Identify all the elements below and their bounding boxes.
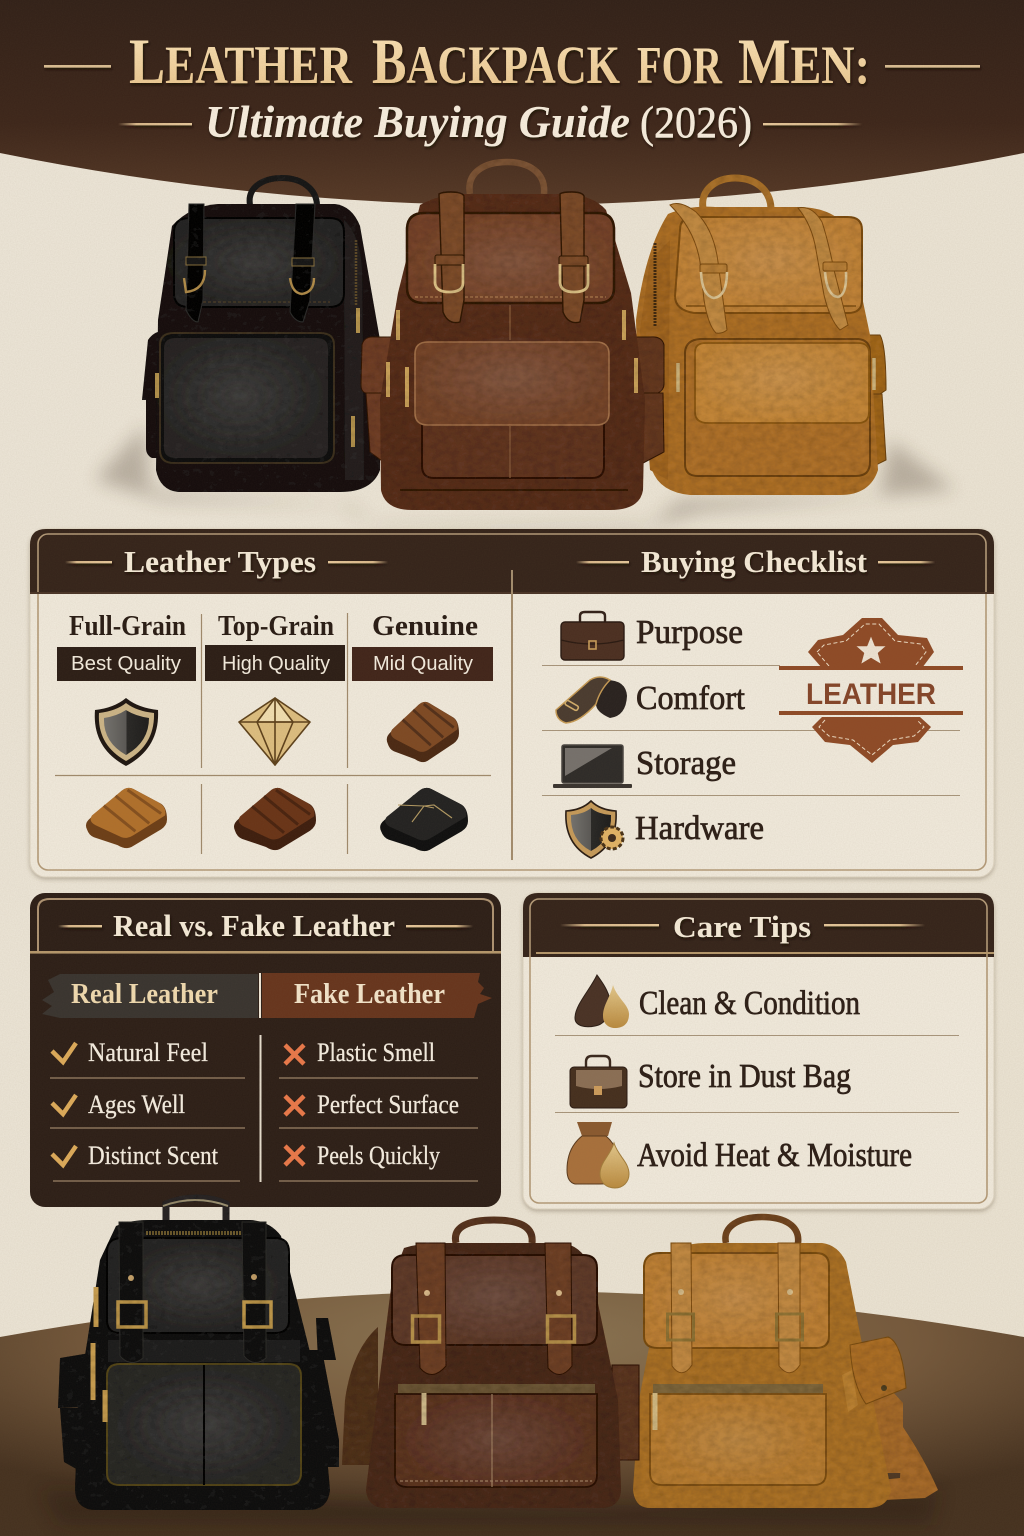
grid dividers: [55, 613, 491, 854]
column header: fake leather: Fake Leather: [294, 979, 445, 1010]
icon: striped leather swatch: [387, 702, 459, 762]
backpack shadows top: [95, 425, 955, 530]
title line: LEATHER: [129, 26, 353, 98]
backpack: brown top: [361, 162, 664, 510]
icon: briefcase: [561, 612, 624, 660]
column: genuine: [352, 610, 493, 681]
icon: tan leather swatch: [86, 788, 167, 848]
real leather list: Distinct Scent: [88, 1141, 219, 1170]
column: genuine: Mid Quality: [373, 653, 473, 675]
icon: conditioner drops: [575, 975, 629, 1028]
care item: store in dust bag: Store in Dust Bag: [638, 1058, 851, 1095]
heading: care tips: Care Tips: [673, 909, 811, 944]
care item: avoid heat and moisture: Avoid Heat & Moisture: [637, 1137, 912, 1174]
header banner: [0, 0, 1024, 205]
heading: real vs fake leather: Real vs. Fake Leather: [113, 908, 395, 943]
backpack: tan bottom: [633, 1217, 938, 1508]
title line: MEN:: [738, 26, 870, 98]
icon: shield: [95, 698, 158, 766]
checklist item: storage: Storage: [636, 745, 736, 782]
panel: real vs fake leather: [30, 893, 501, 1207]
checklist item: purpose: Purpose: [636, 614, 743, 651]
column: full-grain: Best Quality: [71, 653, 181, 675]
column: top-grain: Top-Grain: [218, 610, 334, 642]
backpack: tan top: [636, 178, 886, 495]
column: genuine: Genuine: [372, 610, 478, 642]
badge: leather: LEATHER: [806, 678, 936, 711]
fake leather list: Perfect Surface: [317, 1090, 459, 1119]
icon: comfort strap: [556, 677, 627, 723]
real leather list: Natural Feel: [88, 1038, 208, 1067]
real leather list: Ages Well: [88, 1090, 185, 1119]
checklist item: hardware: Hardware: [635, 810, 764, 847]
icon: shield with gear: [566, 801, 623, 858]
subtitle: [118, 96, 862, 147]
title line: BACKPACK: [372, 26, 620, 98]
fake leather list: [285, 1038, 459, 1170]
panel: care tips: [523, 893, 994, 1209]
column header: real leather: Real Leather: [71, 979, 218, 1010]
column: full-grain: [57, 610, 196, 681]
ground: [0, 1291, 1024, 1536]
backpack: black bottom: [58, 1198, 339, 1510]
panel: leather types and buying checklist: [30, 529, 994, 877]
column: full-grain: Full-Grain: [69, 610, 186, 642]
column header: real leather: [42, 974, 258, 1018]
badge: leather: [779, 618, 963, 763]
backpack: black top: [142, 178, 380, 492]
backpack: brown bottom: [342, 1220, 639, 1508]
checklist item: comfort: Comfort: [636, 680, 746, 717]
icon: dust bag: [570, 1056, 627, 1108]
fake leather list: Peels Quickly: [317, 1141, 440, 1170]
icon: black leather swatch: [380, 788, 468, 851]
icon: laptop: [553, 745, 632, 788]
column header: fake leather: [262, 973, 492, 1018]
title line: FOR: [637, 37, 723, 95]
icon: brown leather swatch: [234, 788, 316, 850]
real leather list: [52, 1038, 219, 1170]
subtitle: (2026): [640, 98, 752, 147]
column: top-grain: [205, 610, 345, 681]
column: top-grain: High Quality: [222, 653, 330, 675]
rows dividers: [50, 1078, 478, 1181]
checklist dividers: [542, 666, 960, 796]
fake leather list: Plastic Smell: [317, 1038, 435, 1067]
heading: buying checklist: Buying Checklist: [641, 544, 868, 579]
icon: diamond: [239, 698, 310, 765]
heading: leather types: Leather Types: [124, 544, 316, 579]
bottom shadows: [40, 1490, 940, 1525]
care item: clean and condition: Clean & Condition: [639, 985, 860, 1022]
subtitle: Ultimate Buying Guide: [205, 96, 630, 147]
icon: sack with drop: [567, 1122, 629, 1188]
title line: [44, 26, 980, 98]
